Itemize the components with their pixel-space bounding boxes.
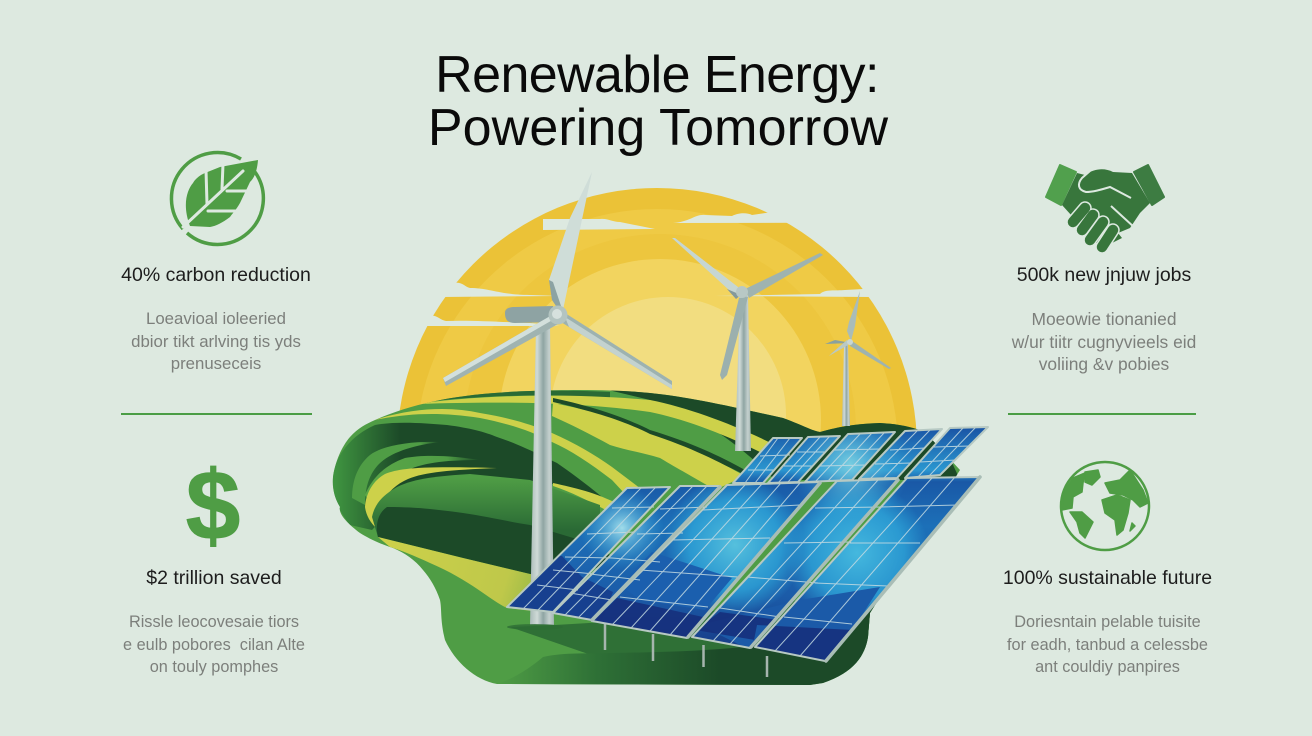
stat body: savings — [123, 613, 305, 676]
stat body: sustainable: Doriesntain pelable tuisite — [1014, 613, 1201, 631]
stat body: carbon: prenuseceis — [171, 354, 261, 373]
panel grid lines — [523, 427, 976, 656]
stat body: savings: e eulb pobores cilan Alte — [123, 636, 305, 654]
support legs — [605, 624, 767, 677]
divider: right — [1008, 413, 1196, 415]
top dark rim — [436, 390, 610, 401]
stat body: carbon: Loeavioal ioleeried — [146, 309, 286, 328]
swirl crescents — [352, 442, 440, 505]
panel frames — [507, 427, 988, 661]
wind turbine: small distant — [825, 291, 891, 426]
stat body: sustainable — [1007, 613, 1208, 676]
stat body: savings: Rissle leocovesaie tiors — [129, 613, 299, 631]
foreground dark ground — [515, 604, 876, 685]
stat heading: carbon: 40% carbon reduction — [121, 264, 311, 286]
stat body: jobs: w/ur tiitr cugnyvieels eid — [1012, 332, 1196, 352]
divider: left — [121, 413, 312, 415]
icon: leaf in circle — [171, 153, 263, 244]
solar panel array — [490, 420, 1000, 677]
stat: trillion saved — [123, 567, 305, 676]
stat body: jobs: voliing &v pobies — [1039, 354, 1169, 374]
stat heading: sustainable: 100% sustainable future — [1003, 567, 1212, 589]
icon: dollar sign: $ — [186, 450, 240, 560]
yellow wedge D — [553, 483, 612, 510]
stat body: jobs: Moeowie tionanied — [1031, 309, 1177, 329]
left rim and dark swirl — [333, 423, 602, 530]
stat body: sustainable: ant couldiy panpires — [1035, 658, 1180, 676]
thin dark line — [553, 398, 745, 473]
stat body: carbon: dbior tikt arlving tis yds — [131, 332, 301, 351]
back dark hill on the right — [600, 388, 960, 480]
stat body: carbon — [131, 309, 301, 373]
stat: new jobs — [1012, 264, 1196, 374]
ground shadow — [512, 600, 875, 670]
panel surfaces with sky reflection — [509, 428, 986, 660]
cloud bands cut across the sun — [380, 212, 940, 326]
wind turbine: large foreground — [443, 172, 672, 625]
yellow band C — [375, 409, 645, 494]
stat body: savings: on touly pomphes — [150, 658, 278, 676]
wind turbine: middle — [672, 238, 823, 451]
yellow band B — [552, 403, 745, 490]
yellow band A — [417, 396, 775, 452]
icon: globe — [1061, 462, 1149, 550]
stat body: jobs — [1012, 309, 1196, 374]
lower dark band — [376, 507, 610, 574]
title: Renewable Energy: — [435, 46, 879, 104]
yellow meadow strip — [378, 537, 531, 611]
stat body: sustainable: for eadh, tanbud a celessbe — [1007, 636, 1208, 654]
sun with concentric rings — [400, 188, 916, 432]
stat: carbon reduction — [121, 264, 311, 373]
icon: handshake — [1046, 165, 1164, 247]
illustration: sun, hills, turbines, solar panels and icons — [170, 150, 1165, 685]
stat heading: savings: $2 trillion saved — [146, 567, 282, 589]
title: Powering Tomorrow — [428, 99, 888, 157]
stat: sustainable future — [1003, 567, 1212, 676]
rolling green hills — [332, 390, 960, 685]
title — [428, 46, 888, 157]
stat heading: jobs: 500k new jnjuw jobs — [1017, 264, 1191, 286]
